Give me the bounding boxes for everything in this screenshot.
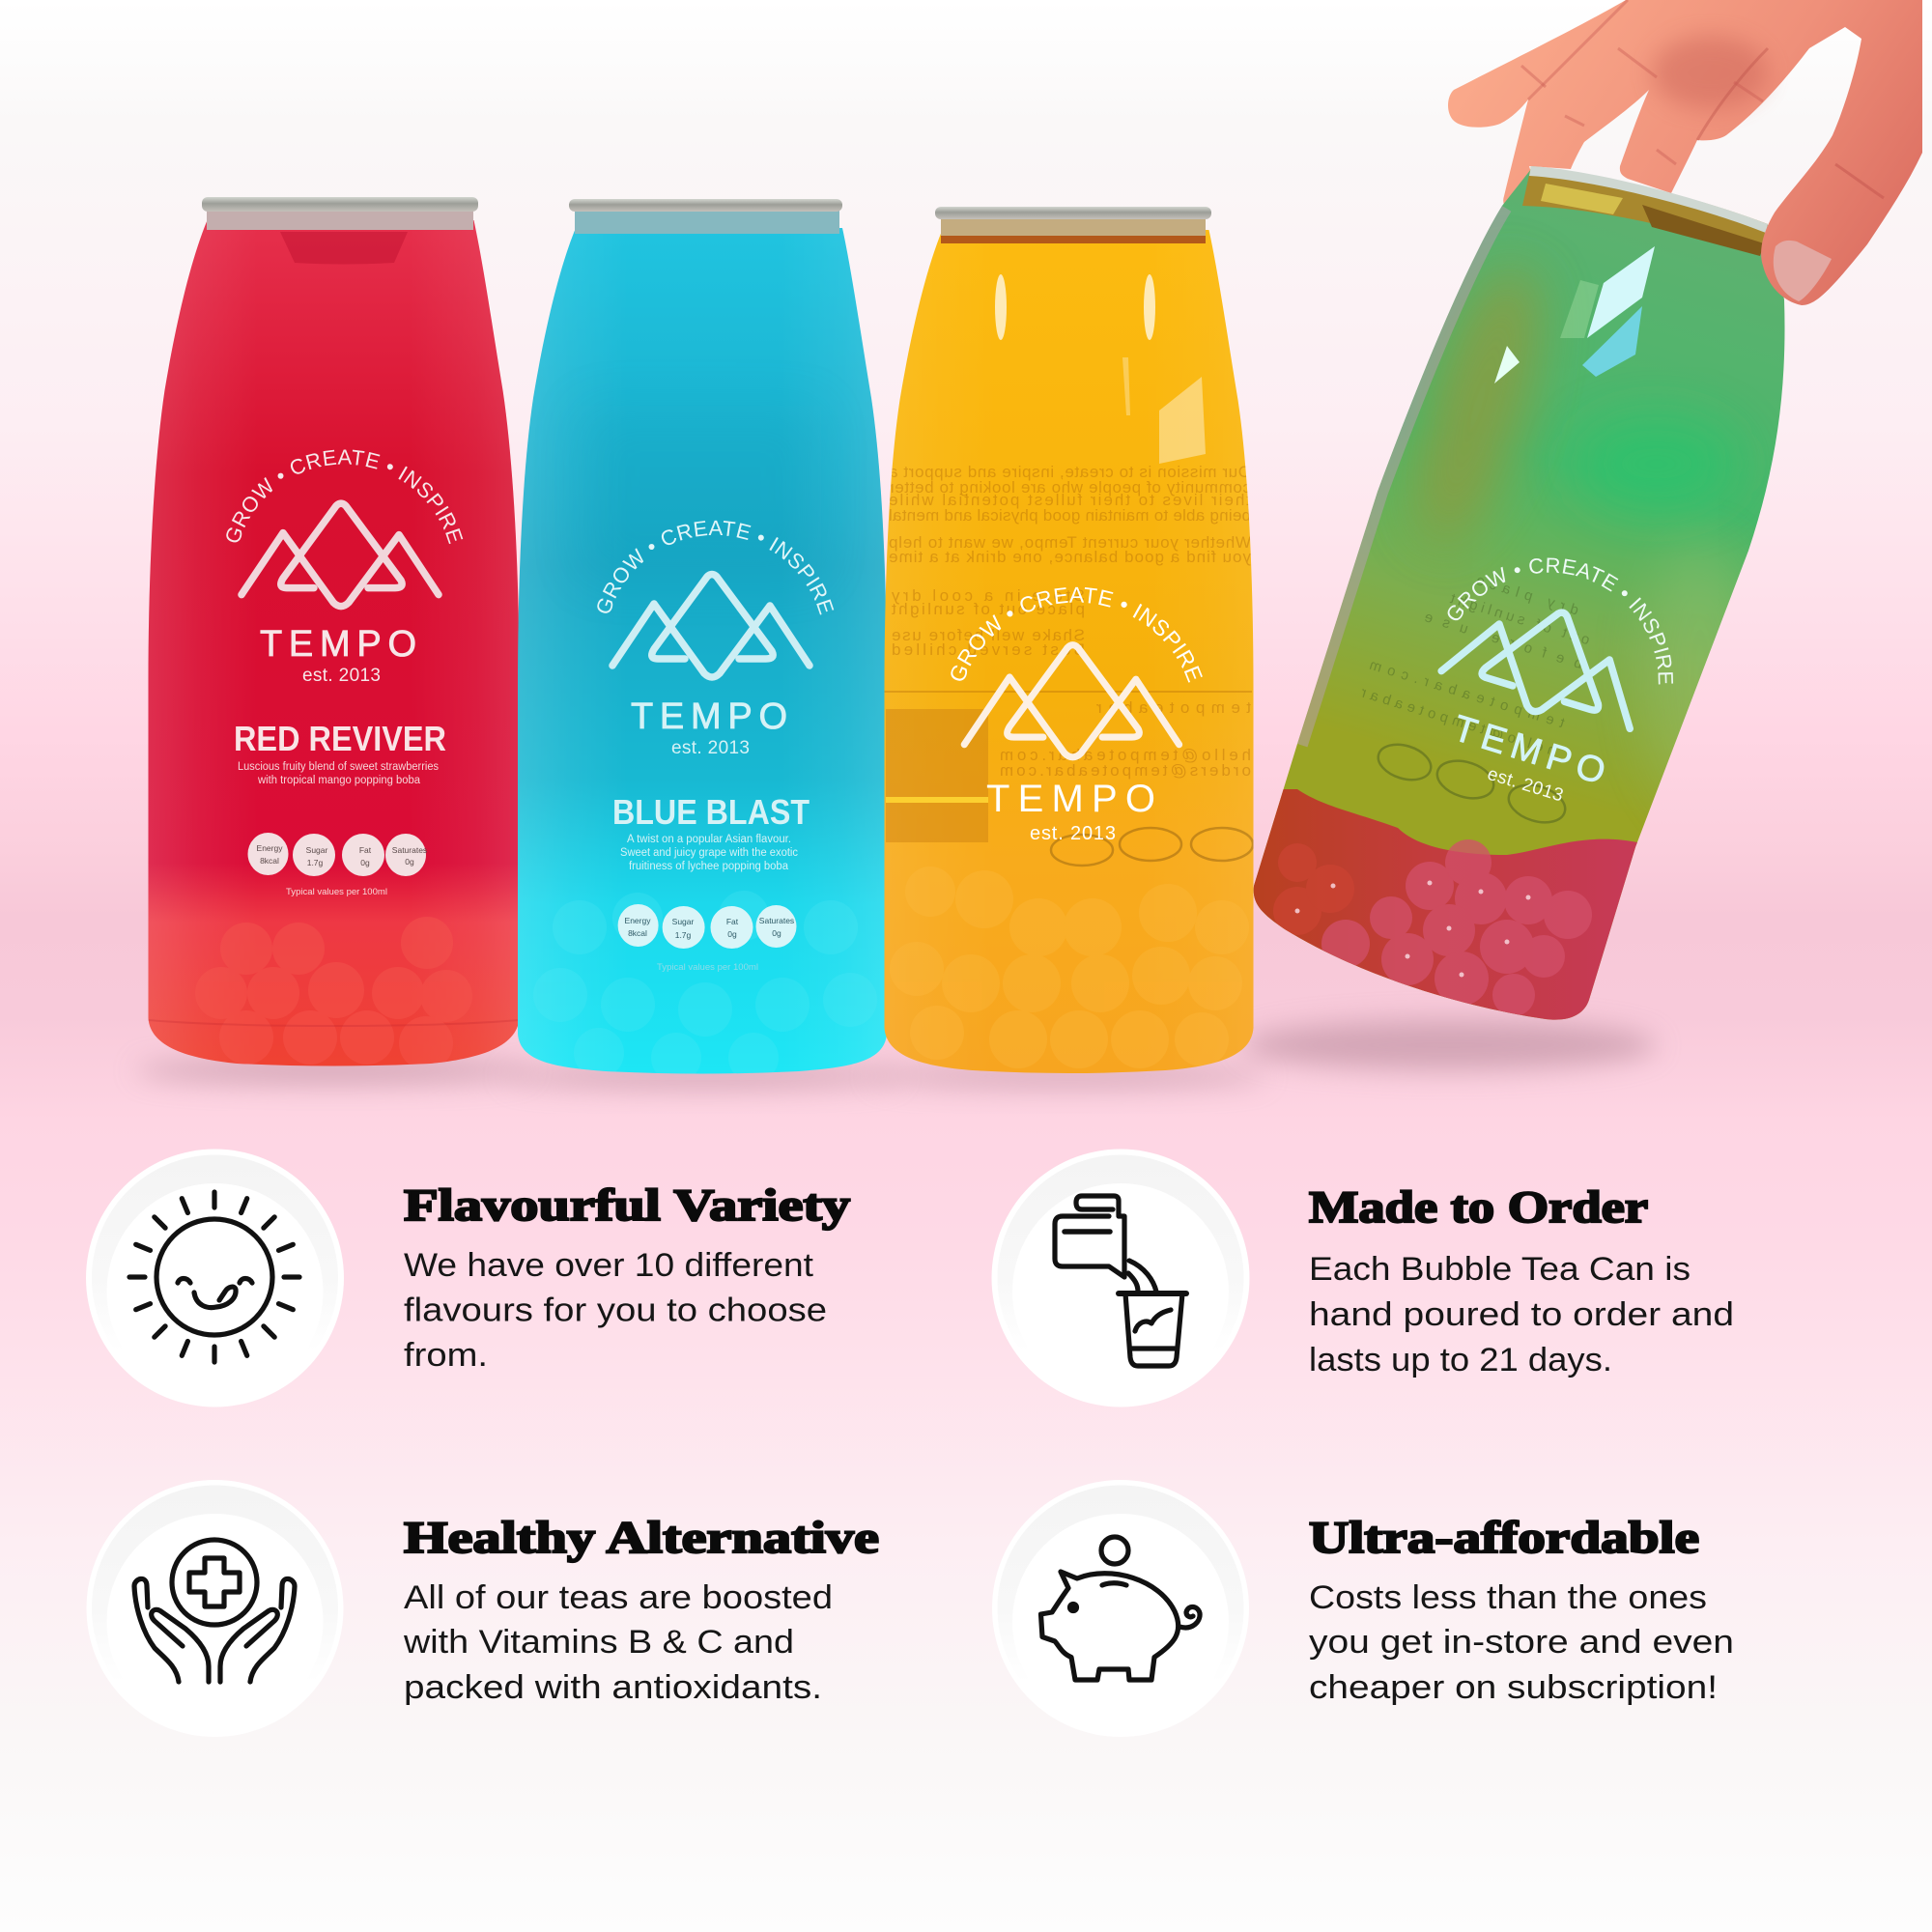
can shadows — [135, 1020, 1657, 1089]
nutrition badges: 1.7g — [675, 930, 692, 940]
rear label ghost print: tempoteabar.com — [1368, 657, 1566, 731]
flavour name: BLUE BLAST — [612, 792, 810, 832]
body text — [404, 1247, 827, 1374]
logo — [597, 520, 835, 681]
body text — [403, 1579, 833, 1706]
typical values note: Typical values per 100ml — [286, 887, 387, 897]
logo — [1437, 558, 1673, 807]
nutrition badges: 0g — [727, 929, 737, 939]
mirrored rear label text: place out of sunlight — [892, 600, 1085, 618]
logo: GROW • CREATE • INSPIRE — [1447, 558, 1673, 684]
heading: Ultra-affordable — [1309, 1513, 1699, 1563]
mirrored rear label text: their lives to their fullest potential while — [889, 491, 1251, 509]
lid — [1522, 166, 1768, 256]
mirrored rear label text: Shake well before use — [892, 626, 1085, 644]
mirrored rear label text: Our mission is to create, inspire and support a — [888, 463, 1251, 481]
logo — [226, 450, 464, 611]
body text: Costs less than the ones — [1309, 1579, 1707, 1616]
body text: lasts up to 21 days. — [1309, 1342, 1612, 1378]
rear label ghost print: dry place — [1474, 572, 1580, 619]
logo: GROW • CREATE • INSPIRE — [226, 450, 464, 545]
flavour description: Luscious fruity blend of sweet strawberries — [238, 761, 439, 773]
lid — [569, 199, 842, 234]
heading: Healthy Alternative — [404, 1513, 879, 1563]
can: Red Reviver — [149, 197, 519, 1066]
can: Blue Blast — [518, 199, 887, 1074]
icon disc: Ultra-affordable — [992, 1480, 1249, 1737]
icon: hands holding medical cross — [134, 1540, 295, 1682]
icon disc: Made to Order — [991, 1150, 1250, 1406]
flavour name: RED REVIVER — [234, 719, 446, 758]
nutrition badges: Sugar — [672, 917, 695, 926]
nutrition badges: Saturates — [759, 916, 794, 925]
body text — [1309, 1251, 1734, 1378]
hand fingers — [1448, 0, 1922, 209]
body text: you get in-store and even — [1309, 1624, 1734, 1661]
logo: GROW • CREATE • INSPIRE — [951, 587, 1203, 683]
icon disc: Healthy Alternative — [87, 1480, 344, 1737]
mirrored rear label text: hello@tempoteabar.com — [1000, 746, 1251, 764]
nutrition badges: Fat — [359, 845, 372, 855]
brand text: TEMPO — [260, 624, 416, 665]
flavour description — [238, 761, 439, 786]
body text: Each Bubble Tea Can is — [1309, 1251, 1690, 1288]
icon: smiling sun — [129, 1192, 299, 1362]
icon: piggy bank with coin — [1041, 1537, 1200, 1680]
can: Orange: est. 2013 — [1030, 823, 1116, 844]
body text: from. — [404, 1337, 488, 1374]
logo — [951, 587, 1203, 761]
typical values note: Typical values per 100ml — [657, 962, 758, 973]
brand text: TEMPO — [986, 778, 1155, 820]
rear label ghost print: before use — [1423, 609, 1584, 672]
lid — [202, 197, 478, 230]
mirrored rear label text: orders@tempoteabar.com — [1000, 761, 1251, 780]
can: Blue Blast: est. 2013 — [671, 738, 750, 758]
body text: cheaper on subscription! — [1309, 1669, 1718, 1706]
logo: est. 2013 — [1485, 764, 1566, 807]
nutrition badges: Sugar — [306, 845, 328, 855]
nutrition badges — [247, 833, 427, 876]
body text: hand poured to order and — [1309, 1296, 1734, 1333]
body text: with Vitamins B & C and — [403, 1624, 794, 1661]
nutrition badges: 0g — [405, 857, 414, 867]
mirrored rear label text: being able to maintain good physical and mental — [889, 506, 1251, 525]
flavour description: A twist on a popular Asian flavour. — [627, 834, 791, 845]
rear label ghost print — [1362, 578, 1589, 753]
flavour description — [620, 834, 798, 872]
rear label ghost print: out of sunlight — [1448, 590, 1592, 648]
logo: GROW • CREATE • INSPIRE — [597, 520, 835, 614]
lid — [935, 207, 1211, 243]
logo: TEMPO — [1448, 708, 1610, 793]
flavour description: Sweet and juicy grape with the exotic — [620, 847, 798, 859]
brand text: TEMPO — [631, 696, 787, 737]
nutrition badges: 8kcal — [628, 928, 647, 938]
heading: Flavourful Variety — [404, 1180, 851, 1231]
window reflections — [1494, 246, 1655, 384]
mirrored rear label text: Whether your current Tempo, we want to help — [889, 533, 1251, 552]
nutrition badges: 8kcal — [260, 856, 279, 866]
rear label ghost print: hello@tempoteabar — [1359, 684, 1558, 759]
mirrored rear label text: Best served chilled — [892, 640, 1085, 659]
nutrition badges: Saturates — [392, 845, 427, 855]
flavour description: fruitiness of lychee popping boba — [629, 861, 789, 872]
nutrition badges: Fat — [726, 917, 739, 926]
mirrored rear label text: tempoteabar — [1096, 698, 1251, 717]
mirrored rear label text: Store in a cool dry — [891, 586, 1085, 605]
mirrored rear label text: you find a good balance, one drink at a time — [889, 548, 1251, 566]
heading: Made to Order — [1309, 1182, 1648, 1233]
icon disc: Flavourful Variety — [86, 1150, 344, 1406]
body text: All of our teas are boosted — [404, 1579, 833, 1616]
can: Orange — [885, 207, 1254, 1073]
nutrition badges: Energy — [625, 916, 651, 925]
flavour description: with tropical mango popping boba — [257, 775, 421, 786]
nutrition badges: 0g — [360, 858, 370, 867]
can: Green, tilted — [1254, 166, 1785, 1020]
nutrition badges: 0g — [772, 928, 781, 938]
hand thumb — [1761, 0, 1922, 305]
can: Red Reviver: est. 2013 — [302, 666, 381, 686]
body text: We have over 10 different — [404, 1247, 814, 1284]
icon: jug pouring into cup — [1055, 1196, 1186, 1366]
nutrition badges: 1.7g — [307, 858, 324, 867]
body text: packed with antioxidants. — [404, 1669, 822, 1706]
body text — [1309, 1579, 1734, 1706]
nutrition badges: Energy — [257, 843, 283, 853]
nutrition badges — [618, 904, 796, 949]
mirrored rear label text — [888, 463, 1251, 780]
mirrored rear label text: community of people who are looking to better — [889, 478, 1251, 497]
body text: flavours for you to choose — [404, 1293, 827, 1329]
